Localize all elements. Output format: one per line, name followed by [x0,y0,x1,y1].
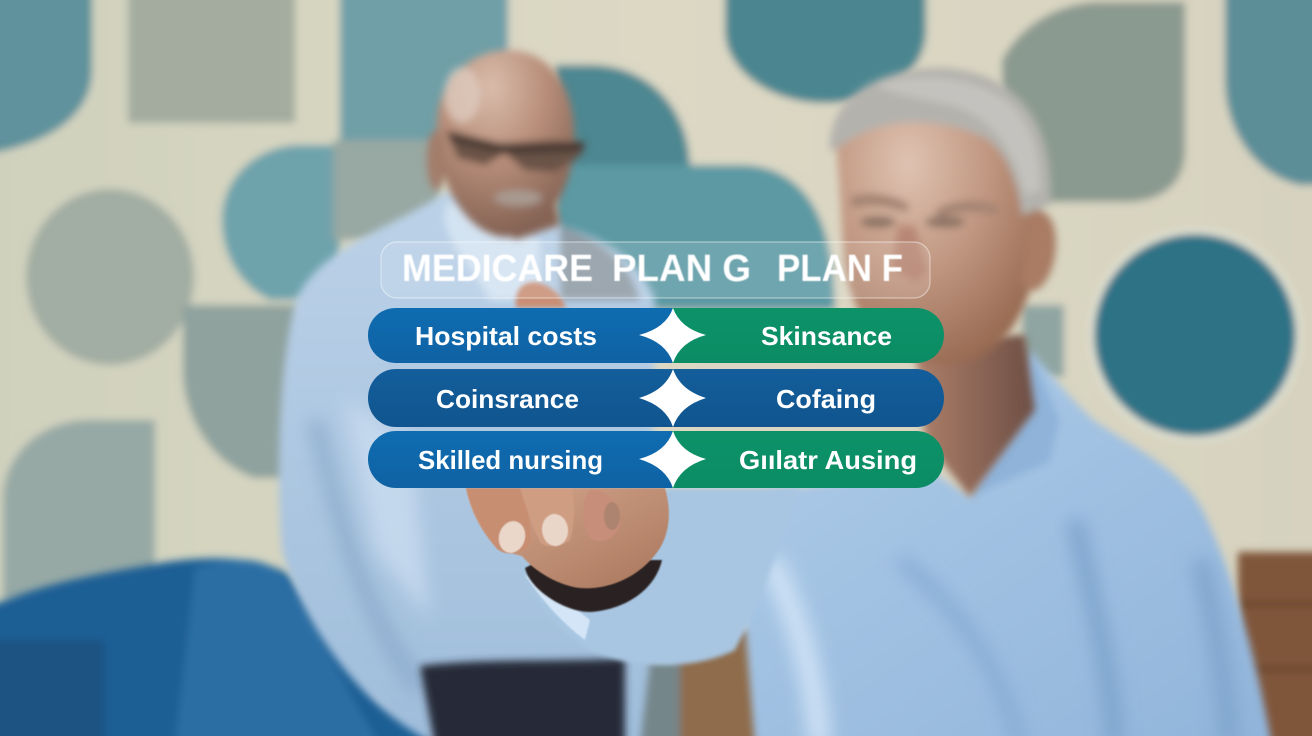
heading: Medicare Plan G / Plan F: PLAN F [777,248,903,290]
person: man in background [279,50,655,736]
comparison row 1 [368,308,944,363]
header frame [381,242,930,298]
shirt folds [315,400,430,690]
dark cuff interior [525,560,662,612]
raised fingertip above panel [516,282,566,308]
heading: Medicare Plan G / Plan F [402,248,903,290]
head [427,50,585,240]
star divider [639,308,706,363]
index finger [466,488,532,554]
shirt folds [770,520,1230,736]
label: Skinsance: Skinsance [761,321,892,351]
heading: Medicare Plan G / Plan F: PLAN G [612,248,751,290]
right cell: cofaing [672,369,944,427]
heading: Medicare Plan G / Plan F: MEDICARE [402,248,593,290]
torso shirt [700,350,1272,736]
hand [466,488,669,588]
sofa [0,558,460,736]
label: Cofaing: Cofaing [776,384,876,414]
right cell: skinsance [672,308,944,363]
label: Skilled nursing: Skilled nursing [418,445,603,475]
star divider [639,431,706,488]
comparison row 2 [368,369,944,427]
neck [915,335,1035,497]
left cell: hospital costs [368,308,672,363]
comparison row 3 [368,431,944,488]
nails [495,518,529,556]
thumb [583,490,620,541]
person: man in foreground [700,68,1272,736]
header bar: plan titles [381,242,930,298]
left cell: coinsrance [368,369,672,427]
sleeve [520,488,800,665]
label: Gullatr Ausing: Gıılatr Ausing [739,445,917,475]
trousers [420,658,625,736]
head [830,68,1056,365]
label: Coinsrance: Coinsrance [436,384,579,414]
wooden furniture [622,552,1312,736]
star divider [639,369,706,427]
shirt [279,192,655,736]
label: Hospital costs: Hospital costs [415,321,597,351]
sleeve highlight [525,575,590,640]
middle finger [520,488,574,546]
right cell: gullatr ausing [672,431,944,488]
hand and rolled sleeve [466,488,800,665]
left cell: skilled nursing [368,431,672,488]
